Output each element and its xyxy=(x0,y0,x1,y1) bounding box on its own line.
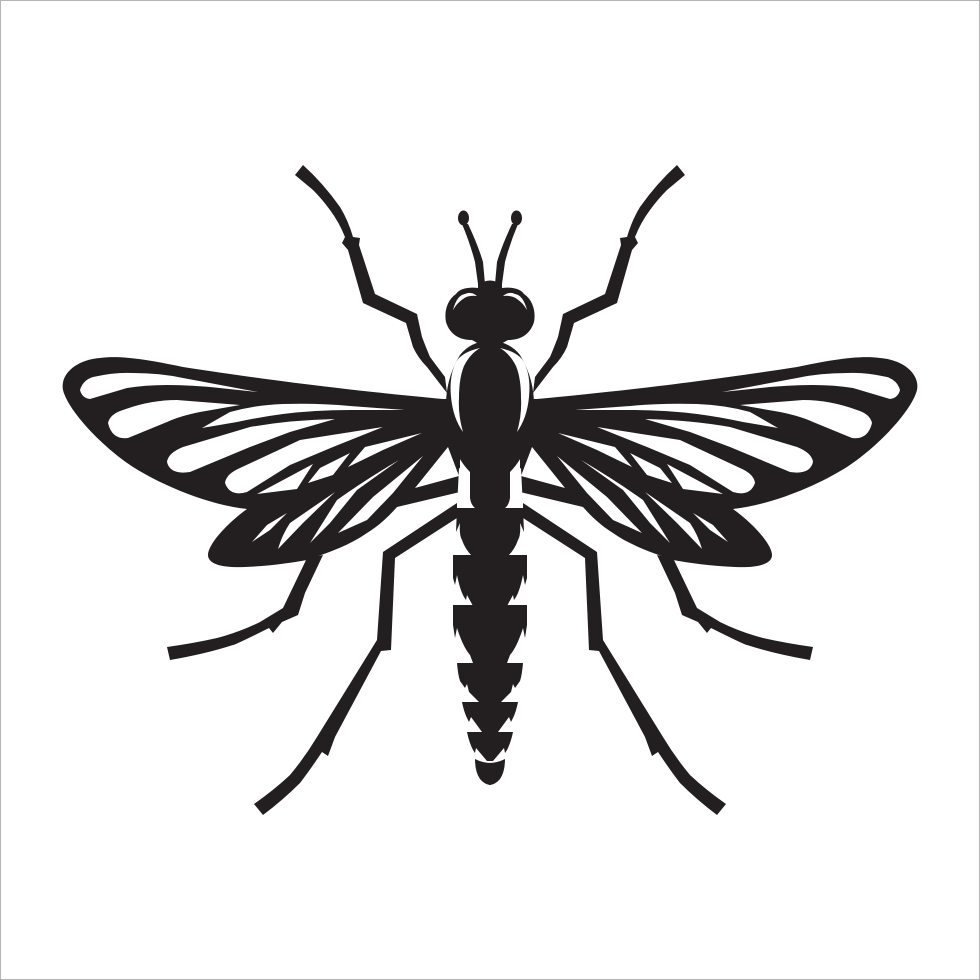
left wing xyxy=(63,357,460,567)
left middle leg xyxy=(167,555,323,660)
abdomen xyxy=(453,506,527,785)
right wing xyxy=(520,357,917,567)
head and eyes xyxy=(445,280,535,350)
right front leg xyxy=(533,165,685,393)
thorax xyxy=(446,340,534,510)
left hind leg xyxy=(254,503,457,815)
antennae xyxy=(458,210,522,284)
right hind leg xyxy=(523,503,726,815)
abdomen right half xyxy=(489,506,527,785)
waist xyxy=(457,468,523,508)
left front leg xyxy=(295,165,447,393)
right middle leg xyxy=(657,555,813,660)
abdomen left half xyxy=(453,506,491,785)
